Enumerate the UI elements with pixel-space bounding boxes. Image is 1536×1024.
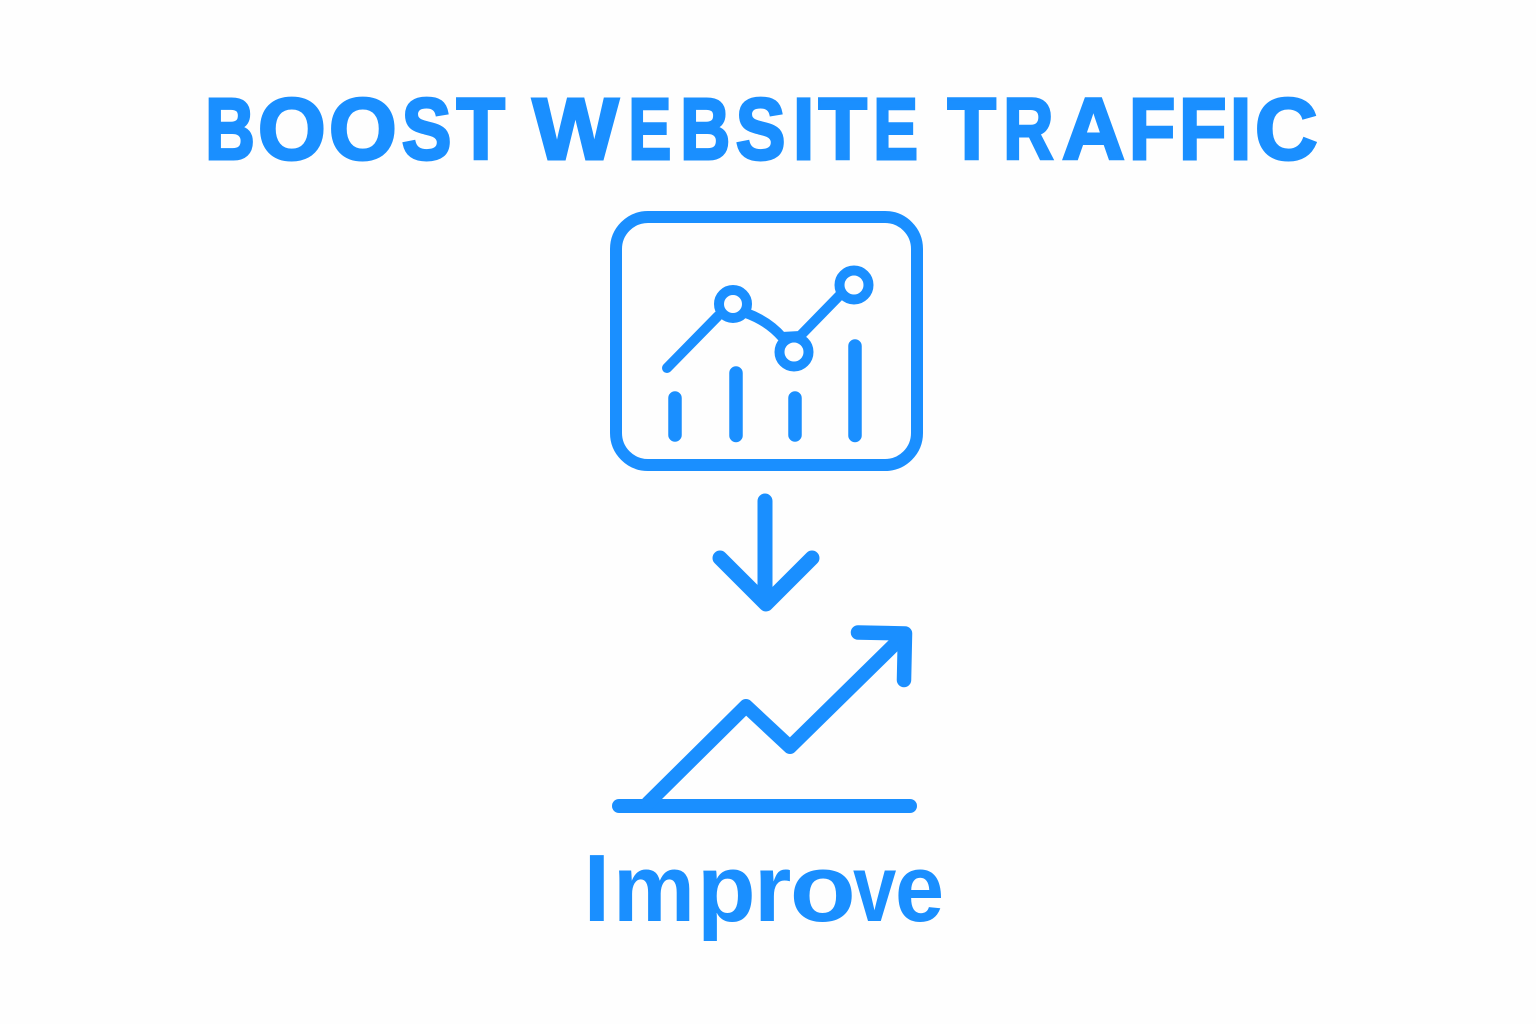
label: Improve: m xyxy=(613,835,695,942)
title: B xyxy=(205,81,255,178)
title: I xyxy=(793,81,814,178)
icon: analytics dashboard xyxy=(616,217,917,465)
label: Improve: r xyxy=(754,835,791,942)
icon: growth chart xyxy=(619,632,910,806)
title: W xyxy=(532,81,619,178)
label: Improve: e xyxy=(895,835,944,942)
title: S xyxy=(402,81,451,178)
title: O xyxy=(329,81,397,178)
title: T xyxy=(948,81,996,178)
title: C xyxy=(1255,81,1318,178)
label: Improve: I xyxy=(584,835,610,942)
arrow: down xyxy=(720,501,812,604)
dashboard frame xyxy=(616,217,917,465)
bars xyxy=(675,346,855,436)
baseline xyxy=(619,799,910,813)
rising line xyxy=(648,636,903,803)
title: T xyxy=(818,81,867,178)
title: B xyxy=(680,81,730,178)
title: S xyxy=(736,81,785,178)
title: R xyxy=(1003,81,1053,178)
title: O xyxy=(258,81,326,178)
trend line xyxy=(667,295,840,368)
data point 2 xyxy=(780,338,808,366)
data point 3 xyxy=(840,270,868,300)
label: Improve: o xyxy=(790,835,856,942)
data point 1 xyxy=(719,290,747,318)
title: A xyxy=(1062,81,1125,178)
title: F xyxy=(1179,81,1226,178)
arrow head xyxy=(858,632,905,680)
title: E xyxy=(628,81,671,178)
title: T xyxy=(456,81,505,178)
label: Improve: p xyxy=(697,835,756,942)
label: Improve: v xyxy=(853,835,896,942)
title: I xyxy=(1230,81,1251,178)
title: F xyxy=(1129,81,1175,178)
title: E xyxy=(873,81,918,178)
